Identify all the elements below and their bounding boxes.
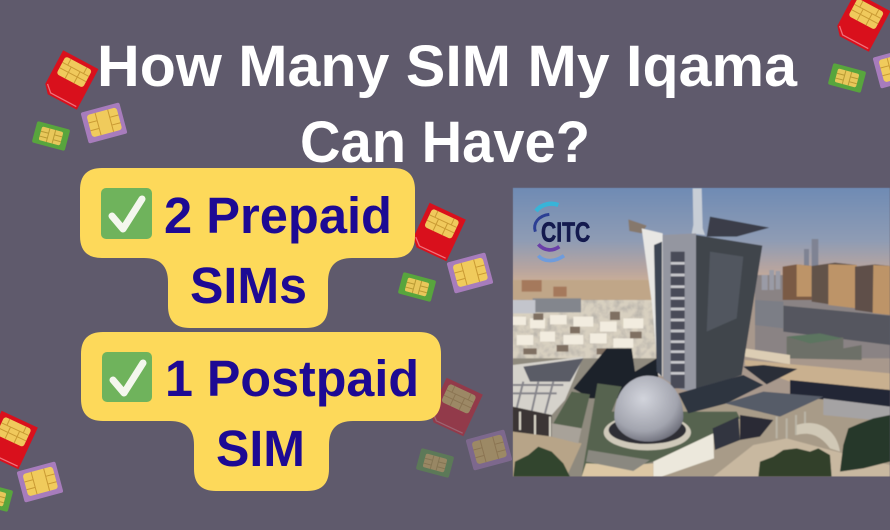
label: 2 prepaid SIMs: SIMs xyxy=(190,257,307,314)
title: How Many SIM My Iqama xyxy=(97,34,798,99)
label: 1 postpaid SIM: SIM xyxy=(216,420,305,477)
trees and plaza xyxy=(713,438,890,477)
photo: CITC tower xyxy=(513,188,890,477)
icon: check mark xyxy=(102,352,152,402)
logo: CITC xyxy=(535,204,590,261)
podium xyxy=(678,375,763,413)
ground base xyxy=(656,285,890,399)
plaza and lower ground xyxy=(513,358,656,477)
label: 2 prepaid SIMs xyxy=(164,187,392,314)
label: 1 postpaid SIM: 1 Postpaid xyxy=(165,350,419,407)
icon: check mark xyxy=(101,188,152,239)
sim cards: bottom left cluster xyxy=(0,411,63,512)
dark structures xyxy=(573,348,658,398)
canopy left xyxy=(513,357,583,415)
callout: 1 postpaid SIM xyxy=(81,332,441,491)
title xyxy=(97,34,798,175)
callout: 2 prepaid SIMs xyxy=(80,168,415,328)
lower right block xyxy=(787,337,862,360)
sim cards: middle cluster xyxy=(398,203,493,302)
sim cards: top left cluster xyxy=(32,50,127,151)
right buildings xyxy=(755,275,890,358)
dome xyxy=(602,420,692,452)
lower white walls xyxy=(653,433,714,477)
label: 1 postpaid SIM xyxy=(165,350,419,477)
tower xyxy=(628,219,647,233)
logo: CITC: CITC xyxy=(541,217,590,248)
sim cards: faded lower cluster xyxy=(416,378,512,478)
title: Can Have? xyxy=(300,110,590,175)
sim cards: top right cluster xyxy=(828,0,890,93)
label: 2 prepaid SIMs: 2 Prepaid xyxy=(164,187,392,244)
